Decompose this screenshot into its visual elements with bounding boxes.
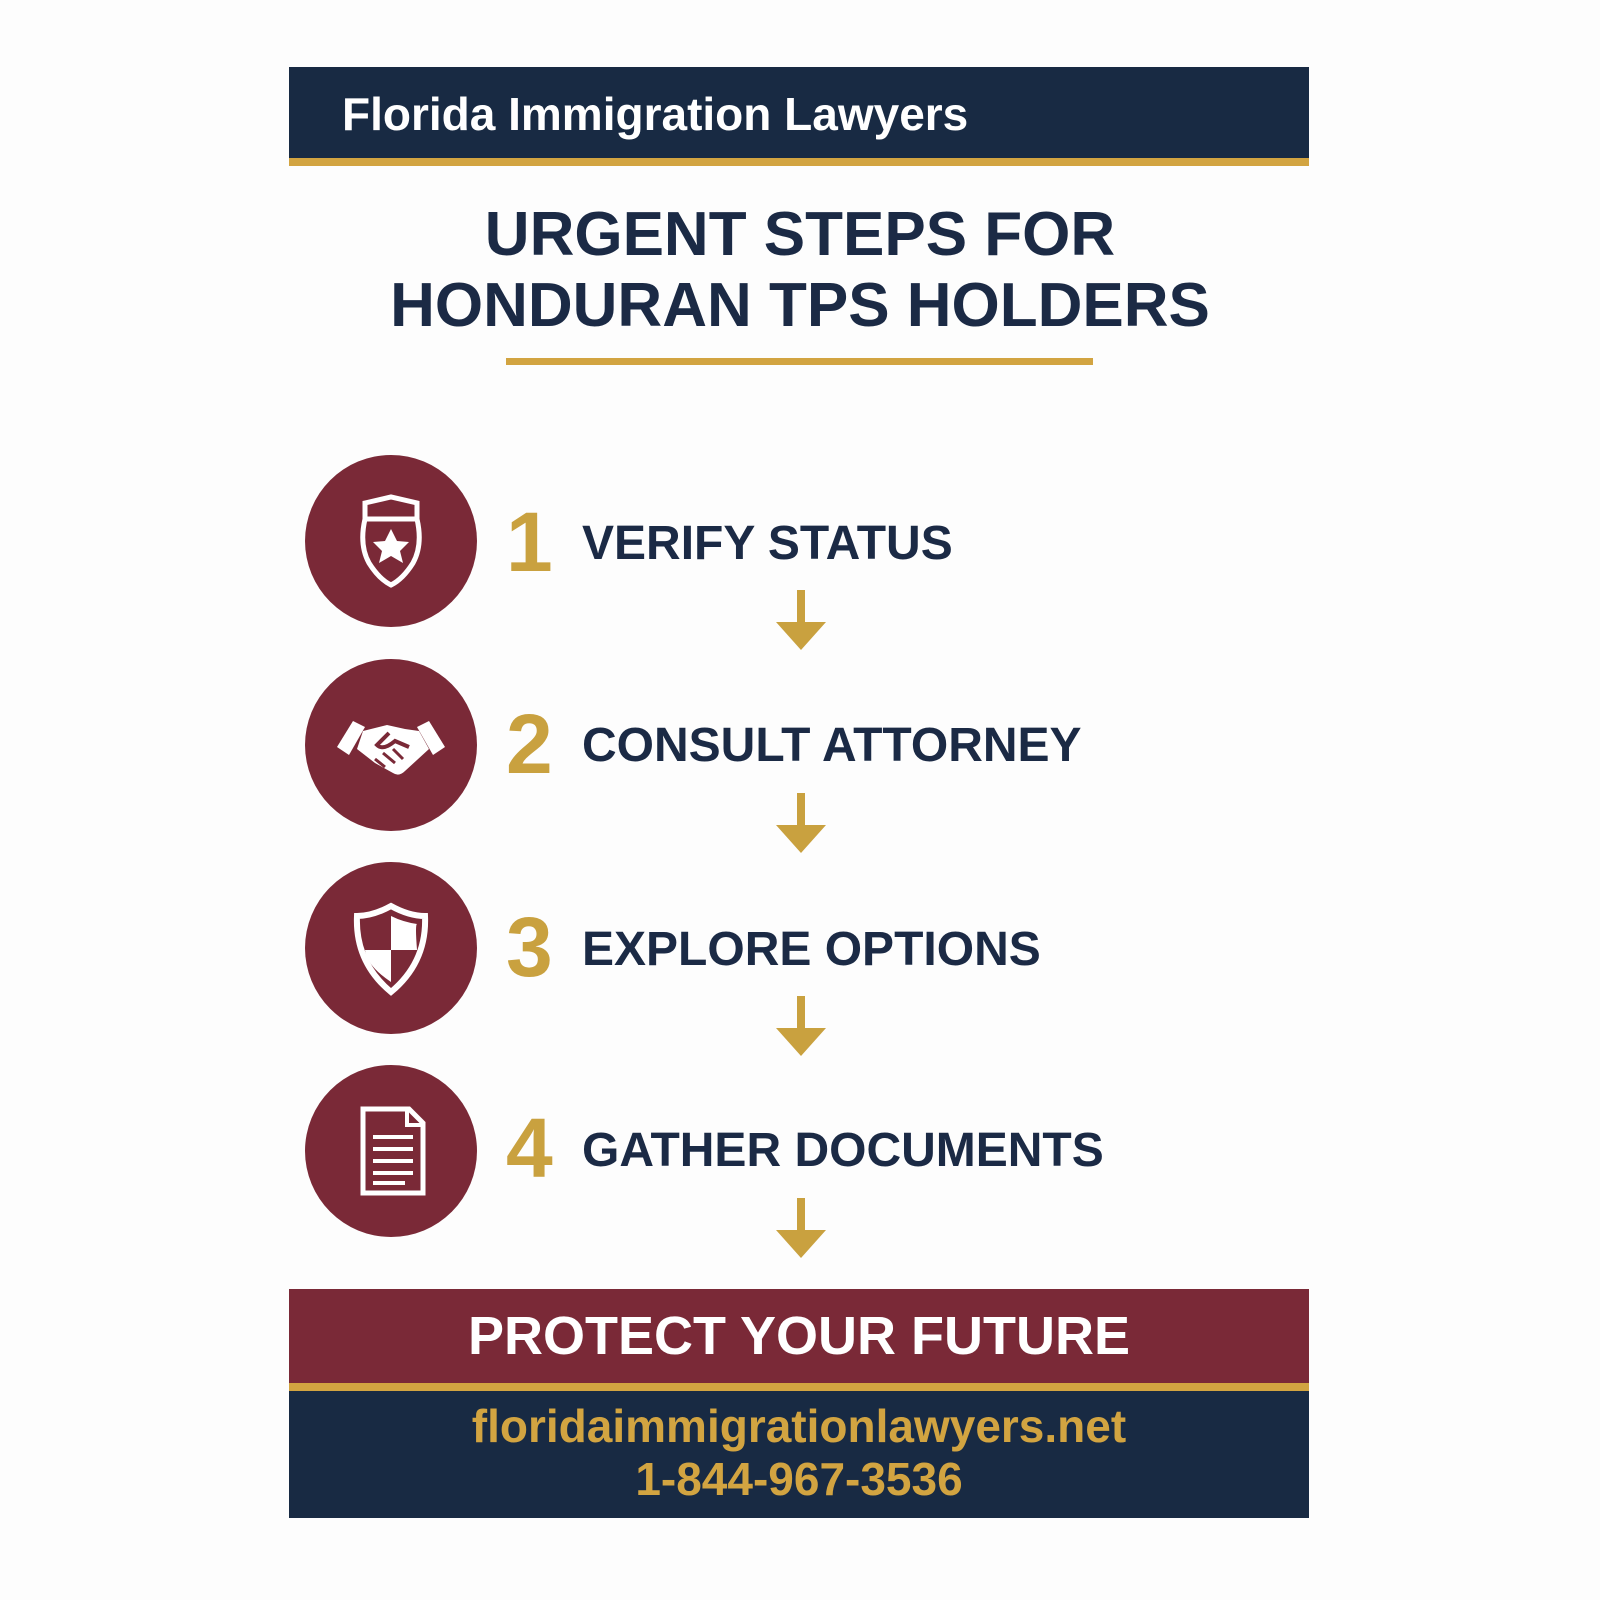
number 1: 1	[506, 495, 553, 589]
label 1: VERIFY STATUS	[582, 517, 953, 570]
label 2: CONSULT ATTORNEY	[582, 719, 1082, 772]
icon: badge	[305, 455, 477, 627]
header bar	[289, 67, 1309, 166]
number 4: 4	[506, 1101, 553, 1195]
footer red band	[289, 1289, 1309, 1383]
arrow 1	[776, 590, 826, 650]
step 4 icon: document	[305, 1065, 477, 1237]
arrow 2	[776, 793, 826, 853]
footer contact: floridaimmigrationlawyers.net	[472, 1400, 1126, 1452]
title	[390, 200, 1210, 340]
header text: Florida Immigration Lawyers	[342, 88, 968, 140]
footer red band: PROTECT YOUR FUTURE	[468, 1306, 1130, 1366]
footer contact	[289, 1391, 1309, 1518]
step 2 icon: handshake	[305, 659, 477, 831]
title: URGENT STEPS FOR	[485, 200, 1115, 269]
number 3: 3	[506, 900, 553, 994]
arrow 4	[776, 1198, 826, 1258]
title: HONDURAN TPS HOLDERS	[390, 271, 1210, 340]
step 3 icon: shield	[305, 862, 477, 1034]
step 1	[305, 455, 477, 627]
label 4: GATHER DOCUMENTS	[582, 1124, 1104, 1177]
arrow 3	[776, 996, 826, 1056]
title underline	[506, 358, 1093, 365]
footer gold line	[289, 1383, 1309, 1391]
label 3: EXPLORE OPTIONS	[582, 923, 1041, 976]
number 2: 2	[506, 697, 553, 791]
footer contact: 1-844-967-3536	[635, 1453, 963, 1505]
